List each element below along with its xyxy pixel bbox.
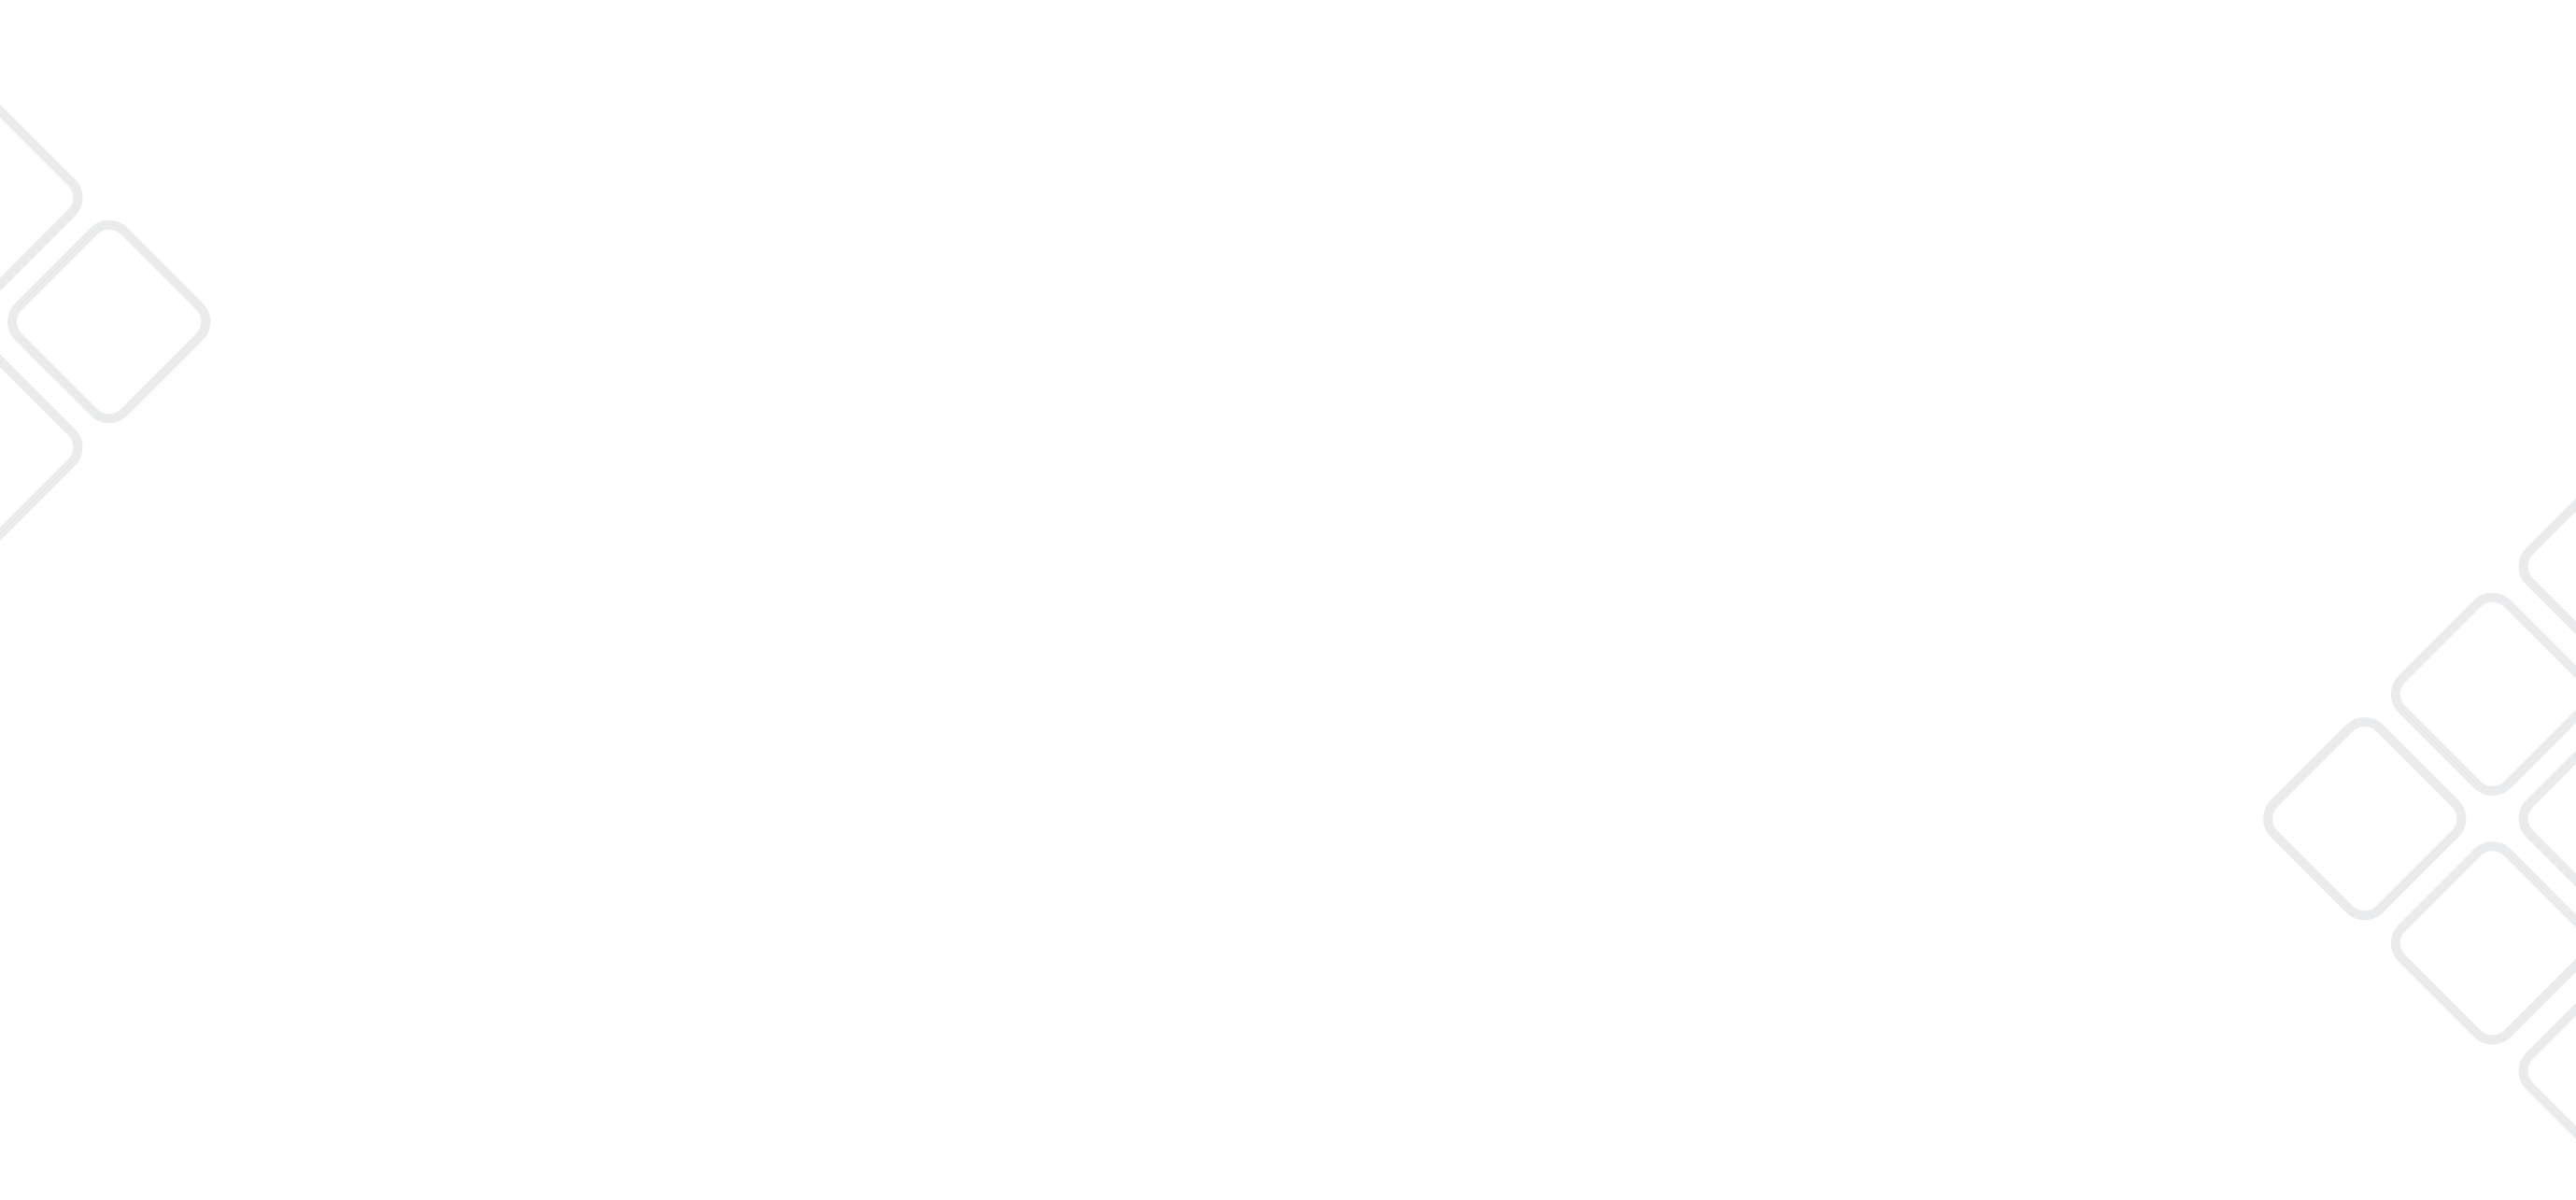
- diamond: right middle edge: [2514, 713, 2576, 925]
- diamond: right lower: [2386, 838, 2576, 1049]
- right diamond cluster: [2259, 460, 2576, 1177]
- diamond: right bottom edge: [2514, 966, 2576, 1177]
- diamond: left centre: [4, 216, 215, 428]
- diamond: right upper: [2386, 588, 2576, 799]
- diamond: right top edge: [2514, 460, 2576, 672]
- diamond: left upper: [0, 92, 87, 304]
- left diamond cluster: [0, 92, 215, 553]
- diamond: right left-most: [2259, 713, 2470, 925]
- diamond: left lower: [0, 342, 87, 553]
